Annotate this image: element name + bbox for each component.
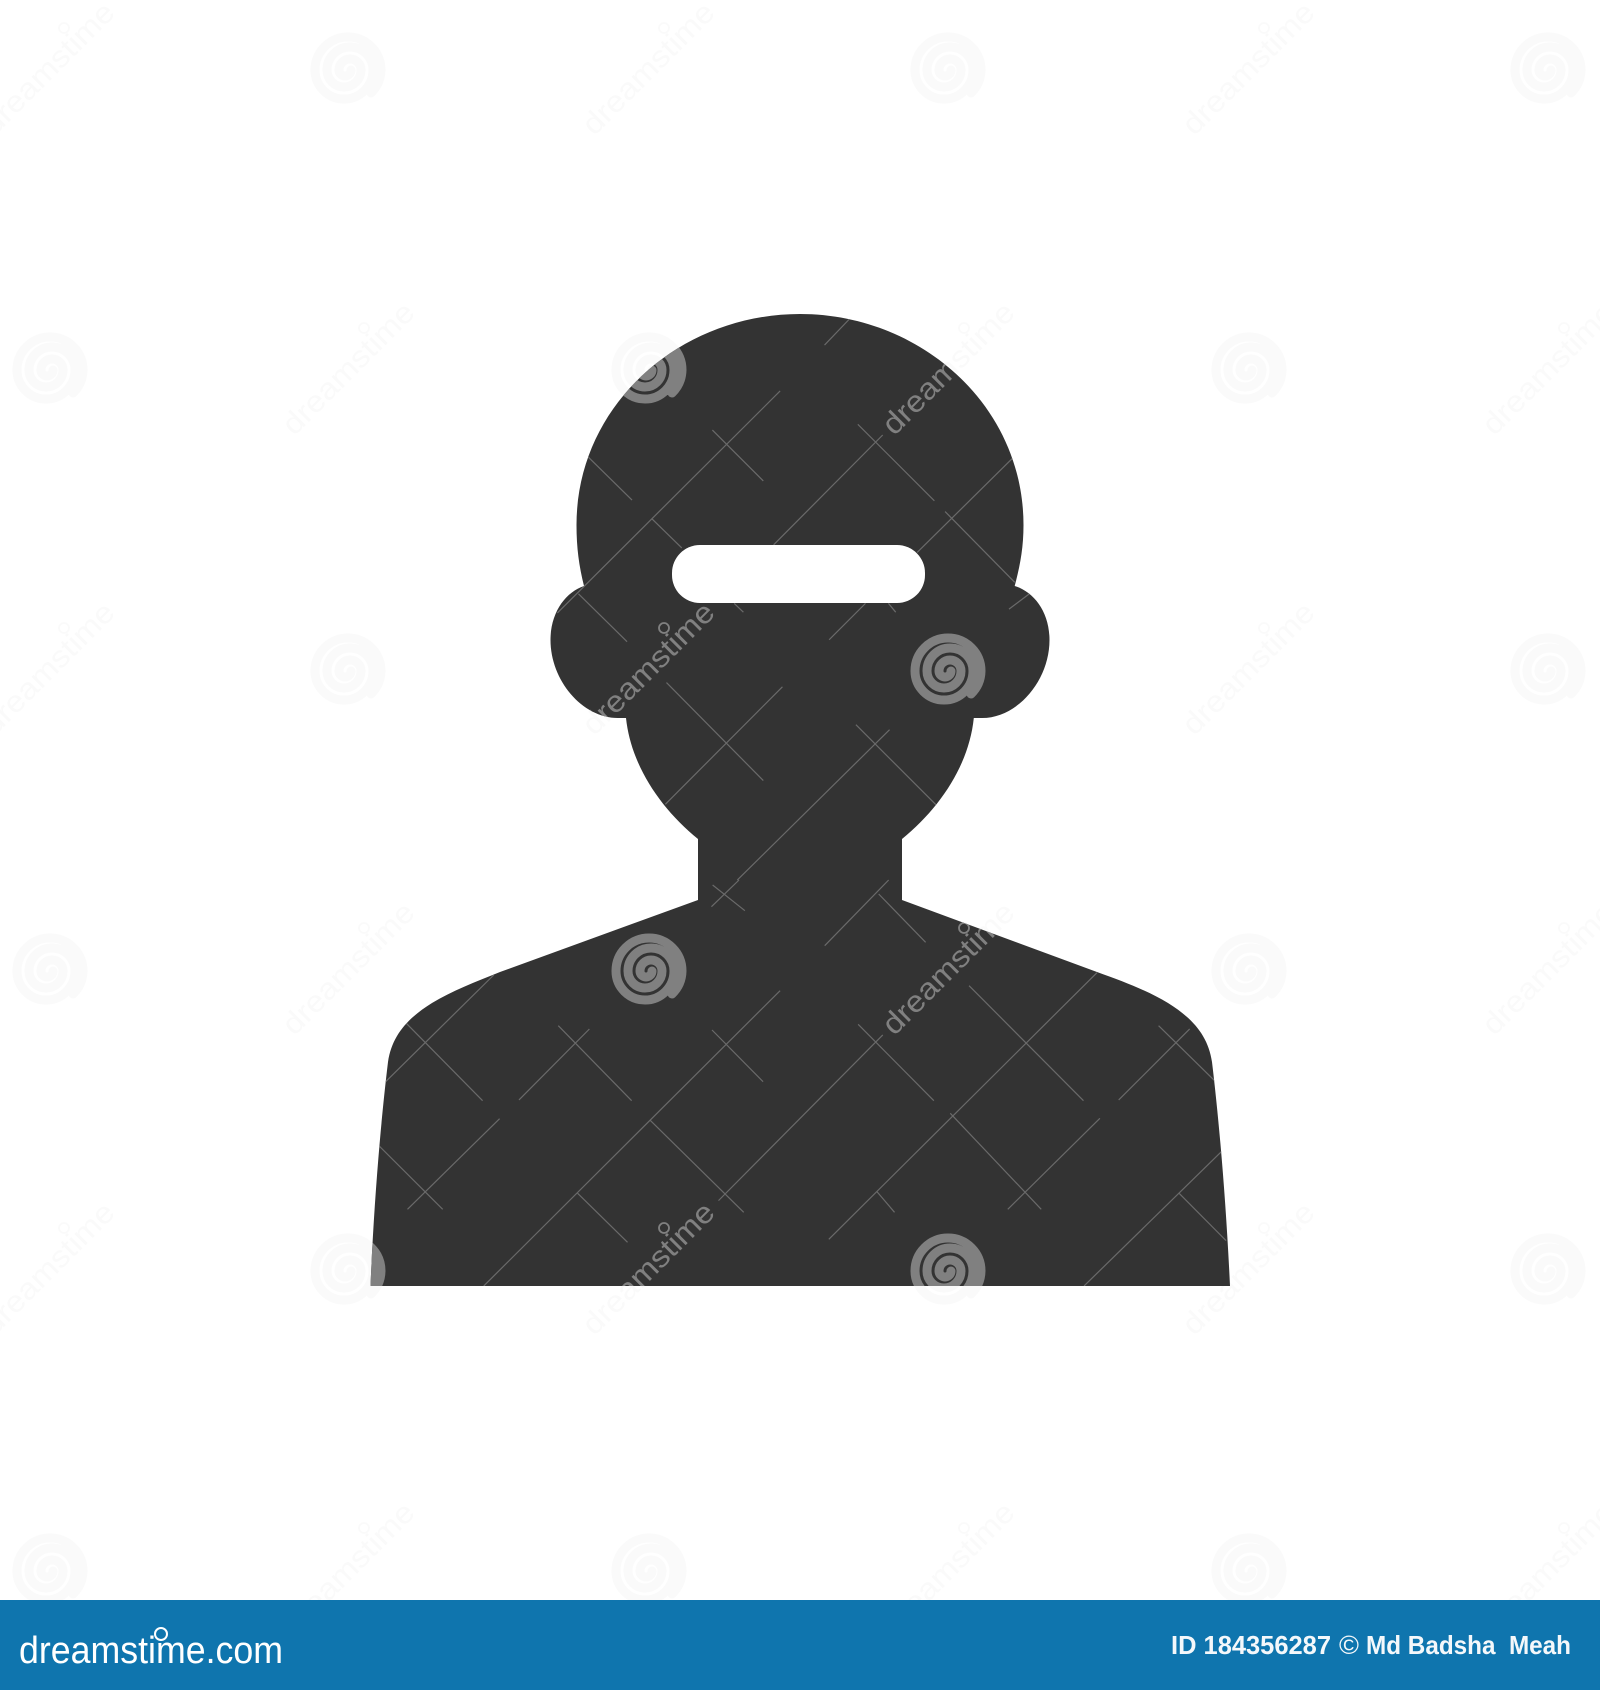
footer credit: image ID and author: ID 184356287 — [1171, 1630, 1331, 1660]
footer credit: image ID and author — [1171, 1630, 1571, 1660]
background watermark pattern: dreamstime — [876, 896, 1021, 1041]
footer logo: dreamstime.com: dreamstime.com — [19, 1630, 283, 1672]
icon: person silhouette with visor — [370, 314, 1230, 1286]
watermark over silhouette: dreamstime — [576, 596, 721, 741]
footer credit: image ID and author: Md Badsha Meah — [1366, 1630, 1571, 1660]
background watermark pattern: dreamstime — [276, 1496, 421, 1641]
background watermark pattern: dreamstime — [1176, 1196, 1321, 1341]
footer band — [0, 1600, 1600, 1690]
background watermark pattern: dreamstime — [1176, 0, 1321, 141]
background watermark pattern: dreamstime — [576, 0, 721, 141]
background watermark pattern: dreamstime — [276, 896, 421, 1041]
watermark over silhouette: dreamstime — [876, 896, 1021, 1041]
background watermark pattern: dreamstime — [876, 296, 1021, 441]
background watermark pattern: dreamstime — [876, 1496, 1021, 1641]
watermark over silhouette: dreamstime — [876, 296, 1021, 441]
background watermark pattern: dreamstime — [276, 296, 421, 441]
watermark over silhouette: dreamstime — [576, 1196, 721, 1341]
visor slot — [672, 545, 925, 603]
background watermark pattern: dreamstime — [576, 596, 721, 741]
watermark over silhouette — [370, 319, 1226, 1286]
background watermark pattern: dreamstime — [1176, 596, 1321, 741]
footer credit: image ID and author: © — [1339, 1630, 1359, 1660]
silhouette body — [370, 314, 1230, 1286]
background watermark pattern: dreamstime — [576, 1196, 721, 1341]
